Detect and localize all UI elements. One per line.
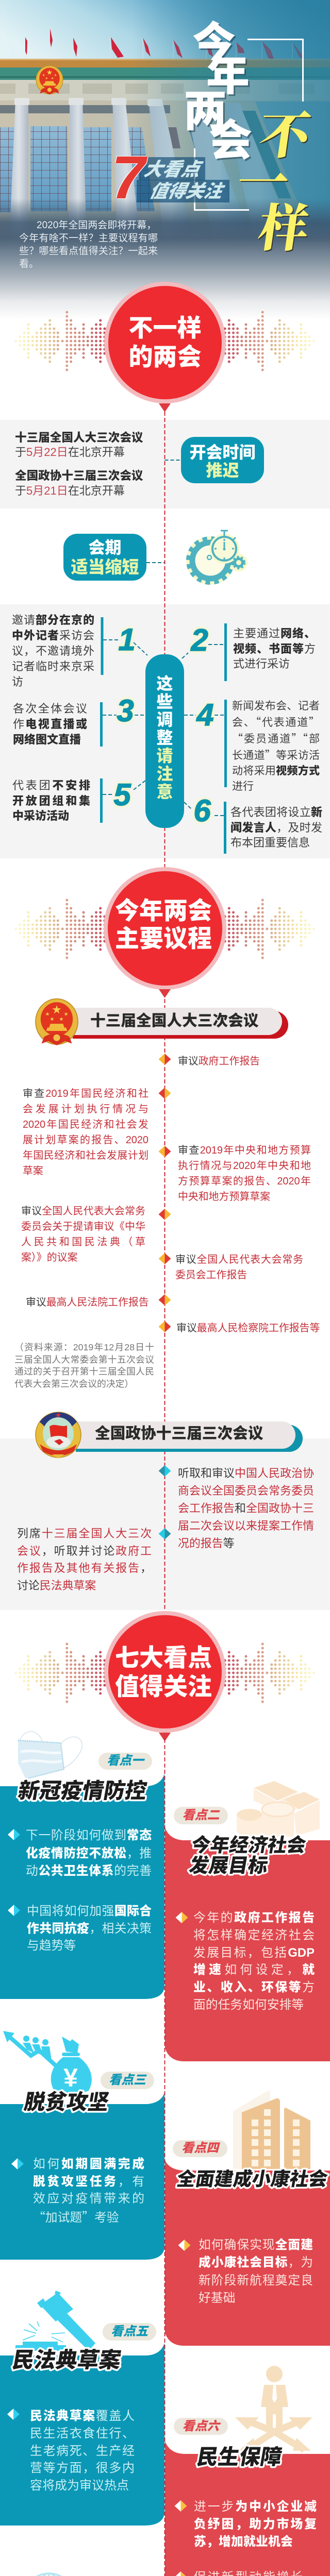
- agenda: civil code motion: 人民共和国民法典（草: [21, 1236, 145, 1248]
- title: 今年两会: 年: [206, 41, 250, 103]
- icon: money bag and rising arrow: [3, 2031, 92, 2094]
- body: moderately prosperous society: 新阶段新航程奠定良: [199, 2274, 313, 2287]
- label: session shortened: 会期: [88, 538, 122, 557]
- banner: CPPCC session: [76, 1421, 303, 1452]
- heading: 七大看点值得关注: 值得关注: [115, 1673, 212, 1700]
- text: adjustments pill label: 注: [156, 765, 173, 783]
- text: adjustments pill label: 整: [156, 728, 173, 747]
- body: livelihood small business: 进一步为中小企业减: [194, 2500, 317, 2514]
- text: adjustment 4: 会、“代表通道”: [232, 714, 320, 730]
- body: civil code: 营等方面，很多内: [30, 2461, 135, 2475]
- text: adjustment 2: 主要通过网络、: [233, 627, 316, 640]
- heading: 七大看点值得关注: [115, 1644, 212, 1700]
- heading: 不一样的两会: 的两会: [129, 343, 201, 370]
- number 1: 1: [118, 622, 136, 657]
- title: 今年两会: [184, 9, 253, 168]
- heading: 今年两会主要议程: [115, 897, 212, 952]
- agenda: CPPCC reports: 会工作报告和全国政协十三: [178, 1502, 314, 1515]
- text: adjustment 5: [12, 779, 90, 822]
- text: CPPCC date: 全国政协十三届三次会议: [15, 469, 143, 482]
- viewpoint titles: 民生保障: [195, 2439, 285, 2470]
- text: adjustment 6: 布本团重要信息: [230, 836, 310, 849]
- timeline diamonds: NPC: [159, 1054, 171, 1332]
- text: adjustments pill label: 这: [156, 674, 173, 693]
- viewpoint badges: [98, 1753, 228, 2576]
- sound wave dots: section two: [16, 900, 314, 958]
- agenda: CPPCC reports: 听取和审议中国人民政治协: [178, 1467, 314, 1480]
- label: session shortened: 适当缩短: [71, 557, 139, 577]
- text: adjustment 1: [12, 614, 94, 688]
- number 6: 6: [193, 793, 211, 828]
- text: adjustment 1: 邀请部分在京的: [12, 614, 94, 626]
- agenda: CPPCC attending NPC: [17, 1527, 152, 1592]
- body: civil code: 容将成为审议热点: [30, 2479, 129, 2493]
- agenda: economic plan report: 年国民经济和社会发展计划: [23, 1150, 148, 1161]
- text: adjustment 4: 动将采用视频方式: [232, 765, 320, 777]
- title: 不一样: 不: [255, 95, 316, 168]
- text: CPPCC date: [15, 469, 143, 497]
- viewpoint titles: 发展目标: [187, 1850, 270, 1878]
- sound wave dots: section three: [16, 1644, 314, 1702]
- agenda: civil code motion: 审议全国人民代表大会常务: [21, 1206, 145, 1217]
- text: adjustments pill label: 调: [156, 710, 173, 729]
- hero frame lines: [194, 39, 304, 211]
- text: adjustment 2: 视频、书面等方: [233, 642, 316, 655]
- body: economic targets: 今年的政府工作报告: [193, 1911, 315, 1925]
- connectors and side bars: adjustments: [101, 617, 226, 854]
- text: adjustment 4: 长通道”等采访活: [232, 747, 320, 762]
- heading: 不一样的两会: 不一样: [129, 314, 201, 342]
- body: moderately prosperous society: 好基础: [199, 2291, 235, 2305]
- agenda: budget report: 方预算草案的报告、2020年: [178, 1176, 311, 1187]
- agenda: CPPCC reports: [178, 1467, 314, 1550]
- number 4: 4: [196, 698, 214, 732]
- body: poverty alleviation: 如何如期圆满完成: [33, 2157, 144, 2171]
- label: opening time delayed: 推迟: [206, 461, 239, 480]
- agenda: civil code motion: 案）》的议案: [21, 1252, 77, 1263]
- red circle badge: section two: [104, 867, 226, 998]
- body: epidemic control: [26, 1828, 152, 1878]
- icon: gavel: [15, 2291, 95, 2351]
- viewpoint titles: 今年经济社会: [189, 1829, 308, 1857]
- timeline diamonds: CPPCC: [159, 1465, 171, 1539]
- badge text: 看点五: 看点五: [111, 2325, 148, 2338]
- agenda: CPPCC attending NPC: 列席十三届全国人大三次: [17, 1527, 152, 1540]
- title: 今年两会: 两: [184, 77, 227, 139]
- intro text: 看。: [19, 259, 39, 269]
- banner: NPC session: [73, 1008, 288, 1039]
- text: adjustment 4: [232, 700, 320, 792]
- text: NPC date: [15, 431, 143, 459]
- agenda: economic plan report: 2020年国民经济和社会发: [23, 1119, 148, 1130]
- badge text: 看点六: 看点六: [183, 2419, 220, 2433]
- central dashed timeline: [164, 399, 165, 1613]
- body: economic targets: 将怎样确定经济社会: [193, 1928, 315, 1942]
- agenda: NPC standing committee report: [175, 1254, 303, 1281]
- text: adjustment 4: 新闻发布会、记者: [232, 700, 320, 712]
- icon: face mask: [18, 1732, 82, 1779]
- text: NPC date: 于5月22日在北京开幕: [15, 446, 125, 459]
- agenda: procuratorate report: 审议最高人民检察院工作报告等: [176, 1323, 320, 1334]
- text: adjustment 1: 访: [12, 675, 23, 688]
- agenda: CPPCC attending NPC: 作报告及其他有关报告，: [17, 1562, 152, 1574]
- icon: globe with arrows: [18, 2573, 78, 2576]
- subtitle: 7 key points: 值得关注: [148, 181, 224, 201]
- body: economic targets: 发展目标，包括GDP: [193, 1946, 315, 1960]
- source note: NPC decision: 代表大会第三次会议的决定）: [14, 1379, 134, 1389]
- title: 今年两会: 今: [192, 9, 236, 71]
- text: adjustment 3: 各次全体会议: [13, 702, 87, 715]
- number 5: 5: [113, 777, 131, 812]
- body: poverty alleviation: [33, 2157, 144, 2225]
- body: international cooperation: 中国将如何加强国际合: [27, 1904, 152, 1918]
- agenda: civil code motion: 委员会关于提请审议《中华: [21, 1221, 145, 1232]
- number 2: 2: [191, 623, 208, 657]
- icon: CPPCC emblem: [36, 1412, 81, 1459]
- agenda: economic plan report: 展计划草案的报告、2020: [23, 1134, 148, 1146]
- text: adjustment 6: 闻发言人，及时发: [230, 821, 322, 834]
- icon: money bag and rising arrow: ¥: [63, 2063, 78, 2092]
- text: adjustment 6: [230, 806, 322, 849]
- agenda: economic plan report: 草案: [23, 1165, 43, 1177]
- body: epidemic control: 下一阶段如何做到常态: [26, 1828, 152, 1842]
- red circle badge: section three: [104, 1611, 226, 1741]
- label: session shortened: [71, 538, 139, 577]
- heading: 今年两会主要议程: 今年两会: [115, 897, 212, 924]
- heading: 今年两会主要议程: 主要议程: [115, 925, 212, 952]
- viewpoint titles: 新冠疫情防控: [16, 1773, 150, 1805]
- badge text: 看点一: 看点一: [107, 1754, 144, 1768]
- grey panel: opening time band: [0, 420, 330, 509]
- body: civil code: 生老病死、生产经: [30, 2444, 135, 2458]
- number 3: 3: [117, 693, 134, 728]
- diamonds: panel bullets: [7, 1829, 191, 2576]
- agenda: CPPCC reports: 商会议全国委员会常务委员: [178, 1484, 314, 1497]
- agenda: budget report: 审查2019年中央和地方预算: [178, 1145, 311, 1156]
- agenda: budget report: 中央和地方预算草案: [178, 1191, 270, 1202]
- body: economic targets: 面的任务如何安排等: [193, 1998, 304, 2012]
- text: adjustment 2: [233, 627, 316, 670]
- body: civil code: 民法典草案覆盖人: [30, 2409, 135, 2423]
- grey panel: adjustments band: [0, 604, 330, 858]
- subtitle: 7 key points: [111, 144, 229, 212]
- banner text: NPC: 十三届全国人大三次会议: [90, 1012, 259, 1029]
- subtitle: 7 key points: 7: [111, 144, 145, 212]
- agenda: NPC standing committee report: 审议全国人民代表大会常务: [175, 1254, 303, 1265]
- pill: session shortened: [63, 534, 164, 581]
- body: civil code: [30, 2409, 135, 2493]
- agenda: CPPCC attending NPC: 会议，听取并讨论政府工: [17, 1545, 152, 1557]
- body: poverty alleviation: 脱贫攻坚任务，有: [33, 2175, 144, 2189]
- icon: coins and bills: [237, 1781, 320, 1837]
- agenda: CPPCC attending NPC: 讨论民法典草案: [17, 1579, 96, 1592]
- text: adjustments pill label: 请: [156, 747, 173, 765]
- intro text: 今年有啥不一样？主要议程有哪: [19, 233, 158, 244]
- heading: 七大看点值得关注: 七大看点: [115, 1644, 212, 1671]
- body: international cooperation: [27, 1904, 152, 1953]
- body: epidemic control: 动公共卫生体系的完善: [26, 1864, 152, 1878]
- body: economic targets: 增速如何设定，就: [193, 1963, 315, 1977]
- agenda: civil code motion: [21, 1206, 145, 1263]
- teal panel: viewpoint one: [0, 1774, 164, 1999]
- title: 不一样: 一: [233, 143, 294, 215]
- text: adjustments pill label: 些: [156, 692, 173, 711]
- intro text: 2020年全国两会即将开幕，: [37, 220, 156, 231]
- red panel: viewpoint four: [165, 2160, 330, 2346]
- teal panel: viewpoint three: [0, 2093, 164, 2260]
- viewpoint titles: 民法典草案: [10, 2343, 124, 2374]
- text: adjustment 5: 中采访活动: [12, 809, 69, 822]
- teal panel: viewpoint five: [0, 2343, 164, 2526]
- banner text: CPPCC: 全国政协十三届三次会议: [95, 1425, 263, 1442]
- title: 不一样: [233, 95, 316, 261]
- red panel: viewpoint two: [165, 1827, 330, 2061]
- subtitle: 7 key points: 大看点: [142, 159, 202, 180]
- text: adjustment 3: 网络图文直播: [13, 733, 81, 746]
- text: NPC date: 十三届全国人大三次会议: [15, 431, 143, 444]
- badge text: 看点二: 看点二: [183, 1808, 220, 1822]
- body: poverty alleviation: 效应对疫情带来的: [33, 2192, 144, 2206]
- text: adjustment 4: “委员通道”“部: [232, 731, 320, 746]
- grey panel: CPPCC agenda band: [0, 1438, 330, 1610]
- intro text: [19, 219, 158, 269]
- central pill: adjustments: [145, 654, 184, 828]
- icon: gear and stopwatch: [186, 531, 248, 585]
- agenda: budget report: 执行情况与2020年中央和地: [178, 1160, 311, 1172]
- source note: NPC decision: [14, 1342, 154, 1389]
- title: 不一样: 样: [254, 188, 315, 261]
- red panel: viewpoint six: [165, 2441, 330, 2576]
- body: international cooperation: 作共同抗疫，相关决策: [27, 1922, 152, 1935]
- icon: apartment buildings: [233, 2090, 310, 2169]
- text: adjustment 4: 进行: [232, 781, 254, 792]
- agenda: CPPCC reports: 况的报告等: [178, 1537, 234, 1550]
- intro text: 些？哪些看点值得关注？一起来: [19, 246, 158, 257]
- source note: NPC decision: （资料来源：2019年12月28日十: [14, 1342, 154, 1352]
- agenda: NPC standing committee report: 委员会工作报告: [175, 1269, 247, 1281]
- viewpoint titles: [7, 1773, 330, 2576]
- agenda: supreme court report: 审议最高人民法院工作报告: [26, 1297, 149, 1308]
- pill: opening time delayed: [165, 437, 264, 483]
- text: adjustment 3: [13, 702, 87, 746]
- icon: person at crossroads: [235, 2366, 312, 2451]
- text: adjustment 5: 代表团不安排: [12, 779, 90, 792]
- body: livelihood small business: [194, 2500, 317, 2549]
- text: adjustment 1: 记者临时来京采: [12, 660, 94, 673]
- label: opening time delayed: [189, 443, 256, 480]
- heading: 不一样的两会: [129, 314, 201, 370]
- viewpoint titles: 全面建成小康社会: [175, 2163, 330, 2191]
- text: adjustment 5: 开放团组和集: [12, 794, 90, 807]
- badge text: 看点四: 看点四: [182, 2141, 219, 2155]
- text: adjustments pill label: 意: [156, 783, 173, 801]
- text: adjustment 1: 中外记者采访会: [12, 629, 94, 642]
- text: adjustment 3: 作电视直播或: [13, 718, 87, 731]
- body: livelihood small business: 苏，增加就业机会: [194, 2535, 293, 2549]
- body: civil code: 民生活衣食住行、: [30, 2427, 135, 2441]
- agenda: economic plan report: 会发展计划执行情况与: [23, 1104, 148, 1115]
- source note: NPC decision: 三届全国人大常委会第十五次会议: [14, 1354, 154, 1364]
- hero photo background: [0, 0, 330, 319]
- agenda: CPPCC reports: 届二次会议以来提案工作情: [178, 1519, 314, 1532]
- body: moderately prosperous society: [199, 2238, 313, 2305]
- text: adjustments pill label: [156, 674, 173, 801]
- sound wave dots: section one: [16, 312, 314, 370]
- agenda: economic plan report: [23, 1088, 148, 1177]
- text: CPPCC date: 于5月21日在北京开幕: [15, 484, 125, 497]
- body: economic targets: [193, 1911, 315, 2012]
- agenda: government work report: 审议政府工作报告: [178, 1056, 260, 1067]
- body: poverty alleviation: “加试题”考验: [33, 2207, 119, 2225]
- title: 今年两会: 会: [209, 106, 252, 168]
- viewpoint titles: 脱贫攻坚: [22, 2084, 112, 2115]
- red circle badge: section one: [104, 282, 226, 412]
- body: moderately prosperous society: 成小康社会目标，为: [199, 2256, 313, 2269]
- text: adjustment 2: 式进行采访: [233, 657, 290, 670]
- body: economic targets: 业、收入、环保等方: [193, 1980, 315, 1994]
- label: opening time delayed: 开会时间: [189, 443, 256, 462]
- text: adjustment 6: 各代表团将设立新: [230, 806, 322, 819]
- icon: national emblem: [36, 999, 78, 1045]
- body: livelihood small business: 负纾困，助力市场复: [194, 2517, 317, 2531]
- text: adjustment 1: 议，不邀请境外: [12, 645, 94, 657]
- lower dashed timeline: [164, 1739, 165, 2576]
- badge text: 看点三: 看点三: [109, 2073, 146, 2087]
- body: epidemic control: 化疫情防控不放松，推: [26, 1846, 152, 1860]
- body: international cooperation: 与趋势等: [27, 1939, 76, 1953]
- agenda: economic plan report: 审查2019年国民经济和社: [23, 1088, 148, 1099]
- agenda: budget report: [178, 1145, 311, 1202]
- source note: NPC decision: 通过的关于召开第十三届全国人民: [14, 1366, 154, 1377]
- body: moderately prosperous society: 如何确保实现全面建: [199, 2238, 313, 2252]
